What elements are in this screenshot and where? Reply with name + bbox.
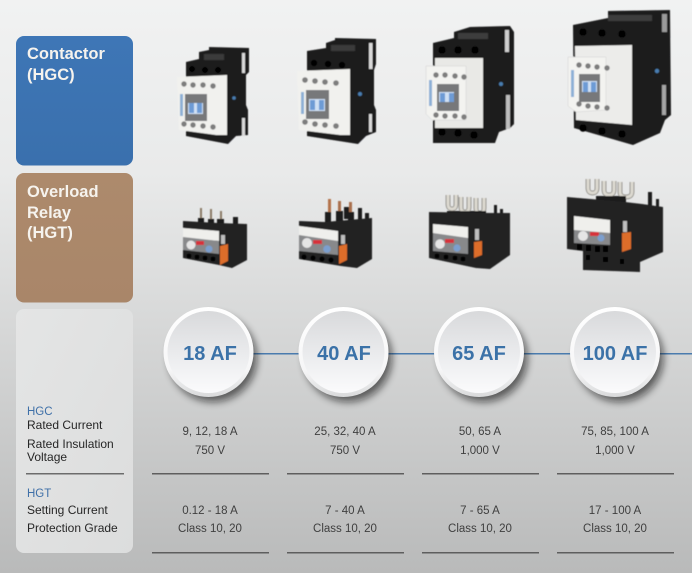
values: 40 AF (287, 426, 404, 554)
values: 100 AF: 1,000 V (595, 445, 635, 457)
heading: contactor: (HGC) (27, 66, 75, 84)
contactor 100 AF (568, 10, 671, 145)
heading: overload relay: Overload (27, 183, 99, 201)
values: 65 AF: Class 10, 20 (448, 523, 512, 535)
badge: 65 AF (434, 307, 528, 402)
badge: 40 AF: 40 AF (317, 343, 371, 365)
contactor 18 AF (177, 47, 249, 144)
values: 100 AF (557, 426, 674, 554)
values: 100 AF: 75, 85, 100 A (581, 426, 649, 438)
values: 65 AF: 50, 65 A (459, 426, 501, 438)
values: 18 AF: 750 V (195, 445, 225, 457)
relay 18 AF (183, 208, 247, 268)
badge: 18 AF: 18 AF (183, 343, 237, 365)
values: 18 AF: Class 10, 20 (178, 523, 242, 535)
text: HGT labels: HGT (27, 488, 51, 500)
contactor 40 AF (297, 38, 376, 144)
connecting line (250, 353, 692, 354)
values: 100 AF: Class 10, 20 (583, 523, 647, 535)
values: 40 AF: Class 10, 20 (313, 523, 377, 535)
text: HGC labels: HGC (27, 406, 53, 418)
text: HGC labels: Rated Insulation (27, 437, 114, 451)
values: 40 AF: 25, 32, 40 A (314, 426, 376, 438)
text: HGT labels: Protection Grade (27, 521, 118, 535)
values: 40 AF: 7 - 40 A (325, 505, 365, 517)
panel: overload relay label (16, 173, 133, 302)
heading: overload relay: (HGT) (27, 224, 73, 242)
badge: 18 AF (164, 307, 257, 402)
panel: specification labels (16, 309, 133, 553)
panel: contactor label (16, 36, 133, 166)
heading: overload relay: Relay (27, 204, 72, 222)
text: HGT labels: Setting Current (27, 503, 108, 517)
left divider (26, 473, 124, 474)
heading: contactor: Contactor (27, 45, 105, 63)
values: 65 AF: 1,000 V (460, 445, 500, 457)
badge: 100 AF: 100 AF (583, 343, 647, 365)
values: 40 AF: 750 V (330, 445, 360, 457)
badge: 100 AF (570, 307, 664, 402)
relay 40 AF (299, 199, 372, 268)
relay 65 AF (429, 195, 510, 269)
text: HGC labels: Voltage (27, 450, 67, 464)
relay 100 AF (567, 179, 663, 272)
values: 18 AF (152, 426, 269, 554)
values: 100 AF: 17 - 100 A (589, 505, 642, 517)
values: 18 AF: 9, 12, 18 A (182, 426, 238, 438)
badge: 65 AF: 65 AF (452, 343, 506, 365)
badge: 40 AF (298, 307, 392, 402)
values: 65 AF: 7 - 65 A (460, 505, 500, 517)
text: HGC labels: Rated Current (27, 418, 103, 432)
contactor 65 AF (426, 26, 514, 143)
values: 18 AF: 0.12 - 18 A (182, 505, 238, 517)
values: 65 AF (422, 426, 539, 554)
